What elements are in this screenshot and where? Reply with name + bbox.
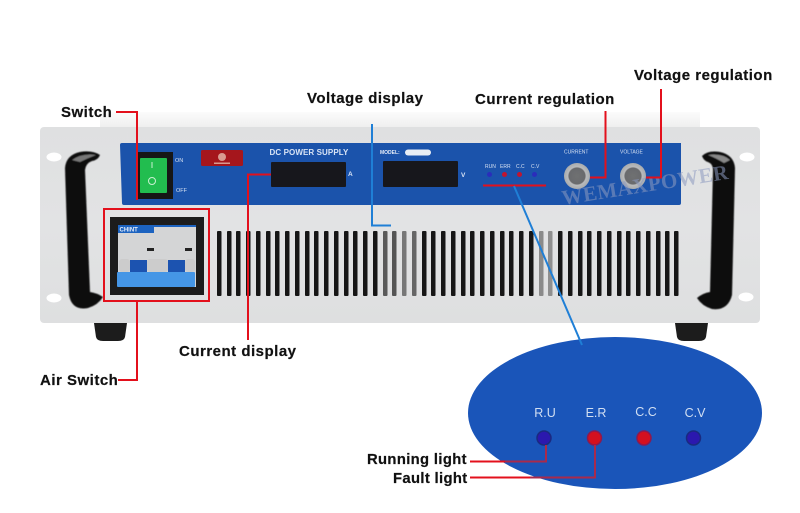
label: voltage regulation: Voltage regulation (634, 67, 773, 84)
panel title: DC POWER SUPPLY (270, 148, 349, 157)
label: fault light: Fault light (393, 471, 468, 487)
leader: fault light (470, 445, 595, 478)
leader: current display (248, 174, 271, 340)
switch labels: ON (175, 158, 183, 164)
arrow: indicator lights to oval (514, 186, 582, 345)
indicator lights: ERR (500, 164, 511, 170)
leader: switch (116, 112, 137, 200)
right handle (697, 152, 735, 309)
red brand badge (201, 150, 243, 166)
enlarged indicator callout oval (468, 337, 762, 489)
watermark: WEMAXPOWER (560, 160, 731, 210)
volt unit: V (461, 172, 466, 179)
knob labels (564, 150, 644, 156)
current display screen (271, 162, 346, 187)
label: current regulation: Current regulation (475, 91, 615, 108)
leader: voltage display (372, 124, 391, 226)
oval labels: C.V (685, 406, 706, 420)
label: voltage display: Voltage display (307, 90, 424, 107)
rocker switch (136, 152, 173, 199)
blue control panel (120, 143, 681, 205)
indicator lights: RUN (485, 164, 496, 170)
knob labels: VOLTAGE (620, 150, 644, 156)
leader: running light (470, 445, 546, 462)
left handle (65, 151, 103, 308)
model label (380, 150, 431, 156)
label: running light: Running light (367, 452, 467, 468)
label: current display: Current display (179, 343, 297, 360)
breaker brand: CHINT (120, 228, 138, 234)
current knob (564, 163, 590, 189)
switch labels: OFF (176, 188, 188, 194)
model label: MODEL: (380, 150, 400, 156)
switch labels (175, 158, 188, 194)
air switch breaker (110, 217, 204, 295)
voltage display screen (383, 161, 458, 187)
label: air switch: Air Switch (40, 372, 118, 389)
indicator lights: C.C (516, 164, 525, 170)
label: switch: Switch (61, 104, 112, 121)
oval indicator lights (537, 431, 700, 445)
vent slots (217, 231, 678, 296)
oval labels (534, 405, 706, 420)
indicator lights (485, 164, 540, 177)
ampere unit: A (348, 171, 353, 178)
power supply chassis (40, 112, 760, 341)
oval labels: C.C (635, 405, 657, 419)
indicator lights: C.V (531, 164, 540, 170)
leader: current regulation (590, 111, 606, 178)
oval labels: E.R (586, 406, 606, 420)
knob labels: CURRENT (564, 150, 588, 156)
leader: air switch (118, 301, 137, 380)
voltage knob (620, 163, 646, 189)
air switch red frame (104, 209, 209, 301)
leader: voltage regulation (646, 89, 661, 178)
bracket under indicator lights (483, 184, 546, 186)
oval labels: R.U (534, 406, 556, 420)
